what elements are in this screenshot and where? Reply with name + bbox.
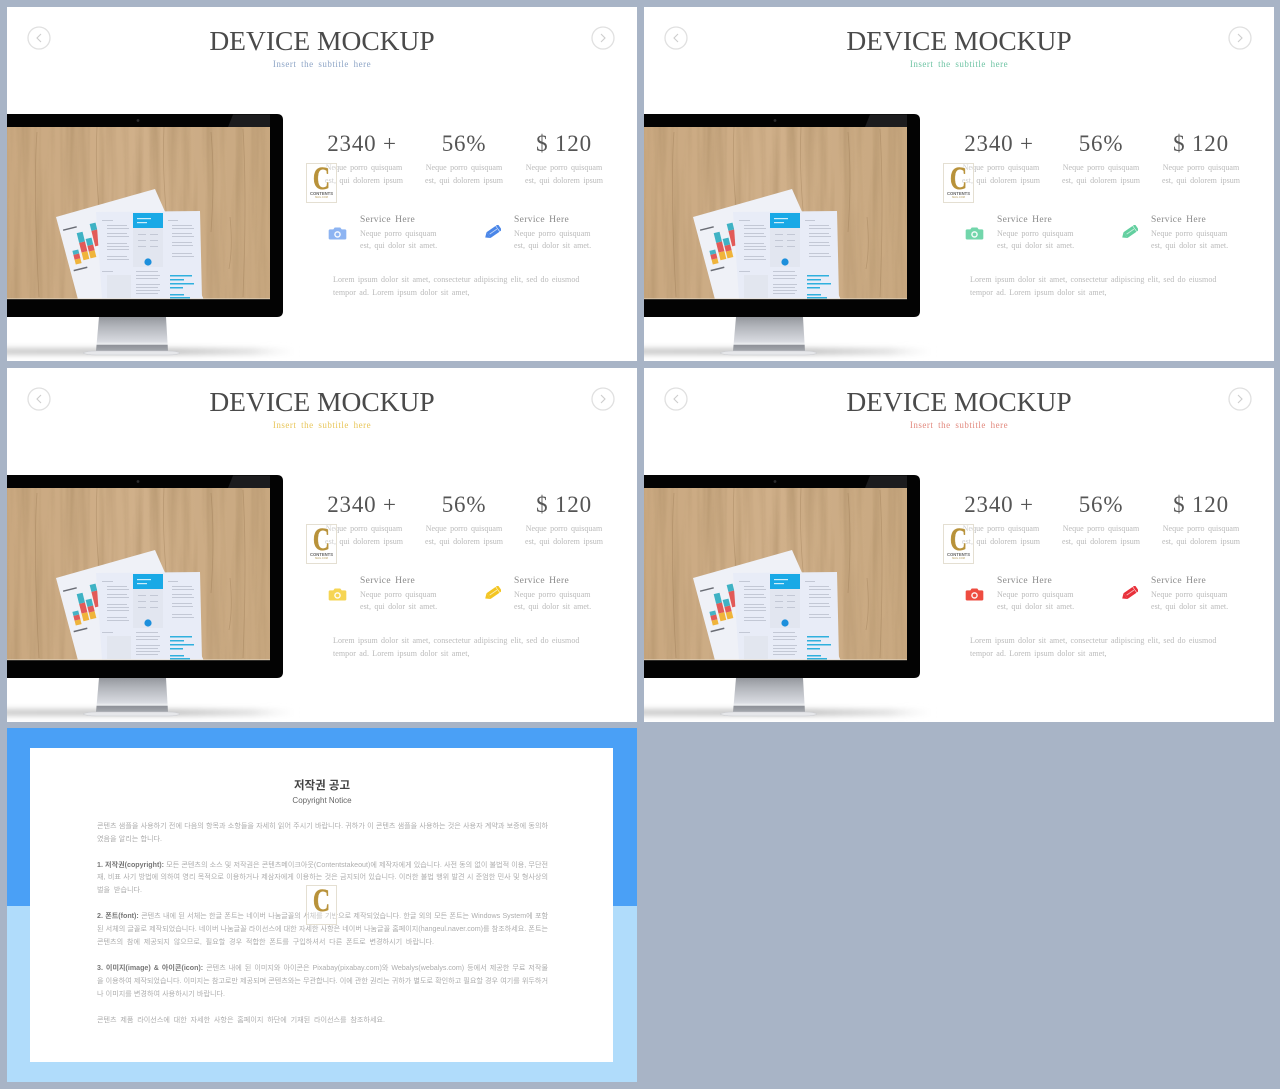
stat text 3 <box>525 163 603 185</box>
stat text 2: Neque porro quisquam <box>426 163 502 172</box>
watermark logo <box>943 524 974 564</box>
stat text 2: est, qui dolorem ipsum <box>1062 537 1140 546</box>
stat text 2 <box>425 163 503 185</box>
stat: 56%: 56% <box>1079 131 1123 156</box>
watermark logo <box>306 163 337 203</box>
icon: pencil <box>485 225 501 238</box>
title: DEVICE MOCKUP <box>209 386 435 417</box>
stat text 1 <box>962 524 1040 546</box>
notice body text: 3. 이미지(image) & 아이콘(icon): 콘텐츠 내에 된 이미지와 아이콘은 Pixabay(pixabay.com)와 Webalys(webalys.com) 등에서 제공한 무료 저작물 <box>97 964 548 972</box>
icon: monitor with wooden desktop and documents <box>7 475 283 718</box>
service block 2 <box>514 214 591 250</box>
stat: 56%: 56% <box>442 492 486 517</box>
panel: device mockup slide, green <box>644 7 1274 361</box>
body text: tempor ad. Lorem ipsum dolor sit amet, <box>970 649 1107 658</box>
stat: 56%: 56% <box>442 131 486 156</box>
service block 1: Service Here <box>997 214 1052 224</box>
stat text 2: est, qui dolorem ipsum <box>425 176 503 185</box>
service block 2 <box>514 576 591 611</box>
heading: copyright notice: 저작권 공고 <box>294 780 350 792</box>
icon: previous arrow <box>28 26 50 50</box>
icon: previous arrow <box>664 388 688 410</box>
body text: Lorem ipsum dolor sit amet, consectetur adipiscing elit, sed do eiusmod <box>333 275 579 284</box>
icon: next arrow <box>592 388 614 410</box>
service block 1: Service Here <box>360 576 415 586</box>
service block 2: est, qui dolor sit amet. <box>1151 602 1228 611</box>
notice body text: 나 이미지를 변경하여 사용하시기 바랍니다. <box>97 990 225 998</box>
icon: monitor with wooden desktop and documents <box>644 114 920 358</box>
notice body text: 2. 폰트(font): 콘텐츠 내에 된 서체는 한글 폰트는 네이버 나눔글꼴의 서체를 기반으로 제작되었습니다. 한글 외의 모든 폰트는 Windows System에 포함 <box>97 912 548 920</box>
stat text 2: Neque porro quisquam <box>1063 163 1139 172</box>
stat text 2 <box>1062 524 1140 546</box>
service block 2: Service Here <box>1151 214 1206 224</box>
stat: $ 120: $ 120 <box>536 492 592 517</box>
blue top band <box>7 728 637 906</box>
subheading: Copyright Notice <box>292 796 352 805</box>
stat: 56%: 56% <box>1079 492 1123 517</box>
stat: 2340 +: 2340 + <box>964 492 1034 517</box>
panel: copyright notice <box>7 728 637 1082</box>
service block 1: Neque porro quisquam <box>360 228 437 238</box>
notice body text: 콘텐츠의 참에 제공되지 않으므로, 필요할 경우 적합한 폰트를 구입하셔서 다른 폰트로 변경하시기 바랍니다. <box>97 938 434 946</box>
stat text 2: est, qui dolorem ipsum <box>1062 176 1140 185</box>
stat: $ 120: $ 120 <box>1173 492 1229 517</box>
service block 1 <box>997 214 1074 250</box>
stat text 2: Neque porro quisquam <box>1063 524 1139 533</box>
stat text 1: Neque porro quisquam <box>963 524 1039 533</box>
service block 1: Service Here <box>360 214 415 224</box>
service block 1: Service Here <box>997 576 1052 586</box>
stat text 1: est, qui dolorem ipsum <box>325 537 403 546</box>
icon: next arrow <box>1228 388 1252 410</box>
title: DEVICE MOCKUP <box>846 386 1072 417</box>
stat text 3 <box>1162 163 1240 185</box>
icon: camera <box>328 228 346 240</box>
stat text 3: Neque porro quisquam <box>1163 163 1239 172</box>
icon: camera <box>966 228 984 240</box>
stat text 2: Neque porro quisquam <box>426 524 502 533</box>
watermark logo: MAIL.COM <box>315 557 328 560</box>
icon: next arrow <box>1228 26 1252 50</box>
title: DEVICE MOCKUP <box>846 25 1072 56</box>
notice body text <box>97 820 548 1027</box>
watermark logo: CONTENTS <box>947 552 970 557</box>
service block 2: Neque porro quisquam <box>514 590 591 598</box>
stat text 3: Neque porro quisquam <box>526 163 602 172</box>
notice body text: 1. 저작권(copyright): 모든 콘텐츠의 소스 및 저작권은 콘텐츠메이크아웃(Contentstakeout)에 제작자에게 있습니다. 사전 동의 없이 불법적 이용, 무단전 <box>97 861 548 869</box>
service block 1: Neque porro quisquam <box>997 590 1074 598</box>
service block 1: est, qui dolor sit amet. <box>360 241 437 250</box>
notice body text: 벌을 받습니다. <box>97 886 142 894</box>
stat: 2340 +: 2340 + <box>327 492 397 517</box>
icon: camera <box>328 588 346 600</box>
service block 2 <box>1151 214 1228 250</box>
service block 1: est, qui dolor sit amet. <box>360 602 437 611</box>
title: DEVICE MOCKUP <box>209 25 435 56</box>
stat text 3: est, qui dolorem ipsum <box>525 176 603 185</box>
subtitle: Insert the subtitle here <box>910 59 1008 69</box>
service block 2: Neque porro quisquam <box>1151 228 1228 238</box>
stat text 3: est, qui dolorem ipsum <box>1162 176 1240 185</box>
stat text 1: Neque porro quisquam <box>963 163 1039 172</box>
stat text 1: Neque porro quisquam <box>326 524 402 533</box>
watermark logo: CONTENTS <box>310 552 333 557</box>
service block 2: est, qui dolor sit amet. <box>514 241 591 250</box>
body text: Lorem ipsum dolor sit amet, consectetur adipiscing elit, sed do eiusmod <box>333 636 579 645</box>
stat text 3 <box>1162 524 1240 546</box>
watermark logo <box>306 885 337 925</box>
service block 1 <box>360 576 437 611</box>
body text <box>970 275 1216 297</box>
stat: $ 120: $ 120 <box>536 131 592 156</box>
body text <box>333 636 580 658</box>
watermark logo <box>306 524 337 564</box>
notice body text: 였음을 알리는 합니다. <box>97 835 162 843</box>
watermark logo: CONTENTS <box>947 191 970 196</box>
body text: Lorem ipsum dolor sit amet, consectetur adipiscing elit, sed do eiusmod <box>970 636 1216 645</box>
icon: monitor with wooden desktop and documents <box>644 475 920 718</box>
stat text 1: est, qui dolorem ipsum <box>962 176 1040 185</box>
stat text 3: est, qui dolorem ipsum <box>1162 537 1240 546</box>
body text: tempor ad. Lorem ipsum dolor sit amet, <box>333 649 470 658</box>
notice body text: 콘텐츠 샘플을 사용하기 전에 다음의 항목과 소항들을 자세히 읽어 주시기 바랍니다. 귀하가 이 콘텐츠 샘플을 사용하는 것은 사용자 계약과 보증에 동의하 <box>97 822 548 830</box>
stat text 1: est, qui dolorem ipsum <box>962 537 1040 546</box>
stat text 3 <box>525 524 603 546</box>
icon: previous arrow <box>28 388 50 410</box>
watermark logo: MAIL.COM <box>315 196 328 199</box>
service block 2: Neque porro quisquam <box>1151 590 1228 598</box>
body text: Lorem ipsum dolor sit amet, consectetur adipiscing elit, sed do eiusmod <box>970 275 1216 284</box>
service block 1 <box>360 214 437 250</box>
body text <box>333 275 580 297</box>
service block 1: est, qui dolor sit amet. <box>997 241 1074 250</box>
stat text 3: Neque porro quisquam <box>526 524 602 533</box>
service block 2: Neque porro quisquam <box>514 228 591 238</box>
stat: $ 120: $ 120 <box>1173 131 1229 156</box>
watermark logo: CONTENTS <box>310 191 333 196</box>
service block 1 <box>997 574 1097 616</box>
stat text 1 <box>325 524 403 546</box>
panel: device mockup slide, blue <box>7 7 637 361</box>
watermark logo <box>943 163 974 203</box>
icon: pencil <box>1122 225 1138 238</box>
watermark logo: MAIL.COM <box>952 557 965 560</box>
service block 1: Neque porro quisquam <box>360 590 437 598</box>
icon: previous arrow <box>664 26 688 50</box>
panel: device mockup slide, yellow <box>7 368 637 722</box>
body text: tempor ad. Lorem ipsum dolor sit amet, <box>970 288 1107 297</box>
stat text 2 <box>1062 163 1140 185</box>
panel: device mockup slide, red <box>644 368 1274 722</box>
service block 2: est, qui dolor sit amet. <box>1151 241 1228 250</box>
notice body text: 을 이용하여 제작되었습니다. 이미지는 참고로만 제공되며 콘텐츠와는 무관합니다. 이에 관한 권리는 귀하가 별도로 확인하고 필요할 경우 여기를 위두하거 <box>97 977 548 985</box>
stat text 3: Neque porro quisquam <box>1163 524 1239 533</box>
body text <box>970 634 1216 660</box>
white notice card <box>30 748 613 1062</box>
stat text 1 <box>325 163 403 185</box>
service block 2: est, qui dolor sit amet. <box>514 602 591 611</box>
subtitle: Insert the subtitle here <box>910 420 1008 430</box>
icon: pencil <box>485 586 501 599</box>
service block 2: Service Here <box>1151 576 1206 586</box>
service block 2: Service Here <box>514 576 569 586</box>
subtitle: Insert the subtitle here <box>273 59 371 69</box>
service block 1: est, qui dolor sit amet. <box>997 602 1074 611</box>
icon: camera <box>966 588 984 600</box>
service block 2: Service Here <box>514 214 569 224</box>
stat text 1 <box>962 163 1040 185</box>
service block 1: Neque porro quisquam <box>997 228 1074 238</box>
notice body text: 된 서체의 글꼴로 제작되었습니다. 네이버 나눔글꼴 라이선스에 대한 자세한 사항은 네이버 나눔글꼴 홈페이지(hangeul.naver.com)를 참조하세요. 폰트는 <box>97 925 548 933</box>
icon: pencil <box>1122 586 1138 600</box>
stat text 2 <box>425 524 503 546</box>
watermark logo: MAIL.COM <box>952 196 965 199</box>
stat text 1: est, qui dolorem ipsum <box>325 176 403 185</box>
body text: tempor ad. Lorem ipsum dolor sit amet, <box>333 288 470 297</box>
subtitle: Insert the subtitle here <box>273 420 371 430</box>
stat text 1: Neque porro quisquam <box>326 163 402 172</box>
stat text 3: est, qui dolorem ipsum <box>525 537 603 546</box>
stat text 2: est, qui dolorem ipsum <box>425 537 503 546</box>
notice body text: 콘텐츠 제품 라이선스에 대한 자세한 사항은 홈페이지 하단에 기재된 라이선스를 참조하세요. <box>97 1016 385 1024</box>
stat: 2340 +: 2340 + <box>964 131 1034 156</box>
stat: 2340 +: 2340 + <box>327 131 397 156</box>
service block 2 <box>1151 574 1251 616</box>
icon: monitor with wooden desktop and documents <box>7 114 283 358</box>
icon: next arrow <box>592 26 614 50</box>
